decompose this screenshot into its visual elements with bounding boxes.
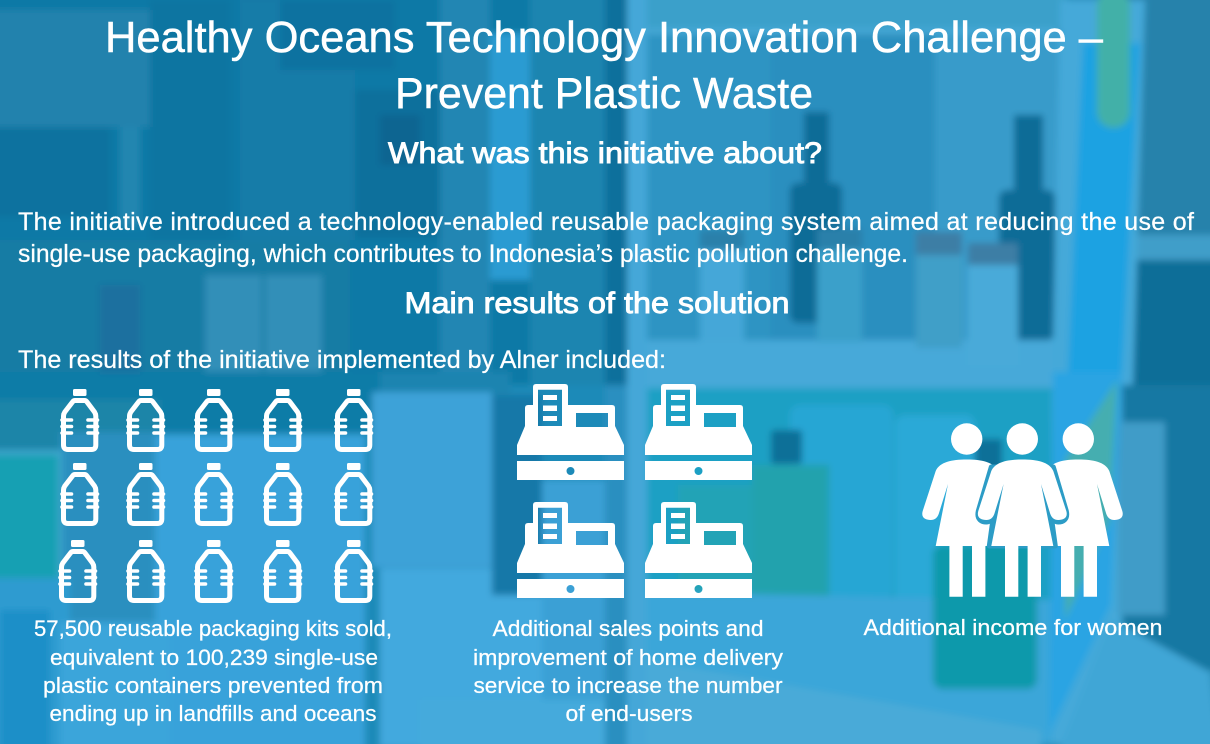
icon: cash registers (517, 384, 752, 598)
caption: sales points: Additional sales points and (492, 616, 764, 641)
caption: packaging kits: equivalent to 100,239 single-use (50, 645, 378, 670)
caption: packaging kits (34, 616, 392, 726)
caption: sales points: of end-users (566, 701, 692, 726)
heading: what was this initiative about: What was this initiative about? (388, 137, 822, 170)
caption: packaging kits: ending up in landfills and oceans (50, 701, 376, 726)
text block: results intro: The results of the initiative implemented by Alner included: (18, 346, 666, 374)
caption: packaging kits: plastic containers prevented from (43, 673, 383, 698)
text block: initiative description: single-use packaging, which contributes to Indonesia’s plastic pollution challenge. (18, 240, 908, 268)
icon: grid of plastic bottles (60, 389, 372, 600)
caption: sales points: improvement of home delivery (473, 645, 783, 670)
title: Healthy Oceans Technology Innovation Challenge – (105, 13, 1104, 62)
heading: main results: Main results of the solution (404, 287, 790, 320)
title: Prevent Plastic Waste (395, 69, 813, 118)
caption: income for women: Additional income for women (864, 615, 1162, 640)
icon: three women (922, 423, 1123, 597)
text block: initiative description (18, 208, 1194, 268)
title (105, 13, 1104, 118)
caption: packaging kits: 57,500 reusable packaging kits sold, (34, 616, 392, 641)
caption: sales points: service to increase the number (474, 673, 782, 698)
caption: sales points (473, 616, 783, 726)
text block: initiative description: The initiative introduced a technology-enabled reusable packaging system aimed at reducing the use of (18, 208, 1194, 236)
